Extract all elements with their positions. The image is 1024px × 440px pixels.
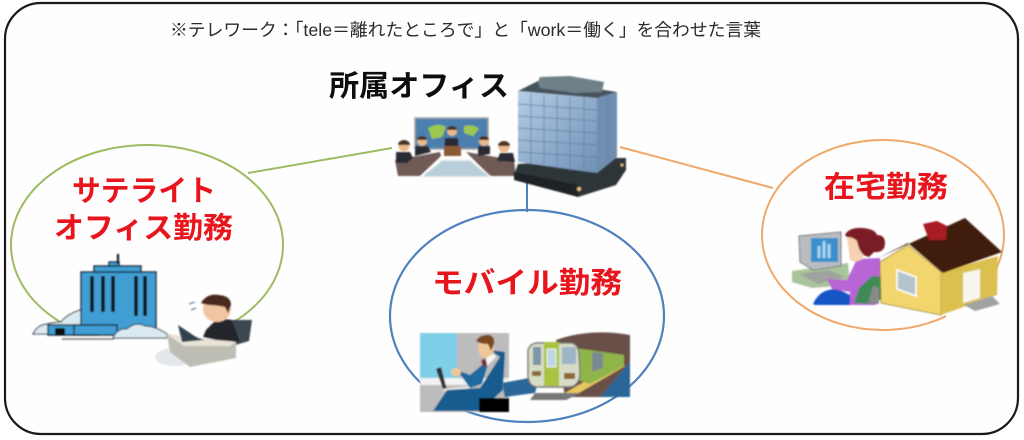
connector: office to home <box>620 147 773 188</box>
circle: mobile work <box>390 210 664 422</box>
definition note: ※テレワーク：「tele＝離れたところで」と「work＝働く」を合わせた言葉 <box>170 20 761 40</box>
heading: satellite office: オフィス勤務 <box>54 212 233 245</box>
connector: office to satellite <box>248 148 392 173</box>
icon: commuter train <box>502 332 630 400</box>
icon: house <box>878 218 1002 315</box>
heading: satellite office <box>54 175 233 245</box>
icon: businessman with laptop <box>420 333 509 412</box>
heading: home work: 在宅勤務 <box>824 171 948 204</box>
icon: woman at computer <box>792 228 885 305</box>
heading: satellite office: サテライト <box>72 175 216 208</box>
icon: office tower <box>514 76 626 197</box>
icon backdrop: hides circle behind satellite picture <box>62 318 227 350</box>
connector: office to mobile <box>526 182 528 212</box>
icon: person at desk <box>155 295 252 367</box>
heading: main office: 所属オフィス <box>329 70 509 103</box>
icon backdrop: hides circle behind house <box>946 296 1008 326</box>
icon: satellite office building <box>33 254 167 339</box>
circle: home work <box>762 140 1004 330</box>
heading: mobile work: モバイル勤務 <box>432 267 622 300</box>
circle: satellite office <box>11 145 283 345</box>
icon: meeting room <box>395 118 516 177</box>
